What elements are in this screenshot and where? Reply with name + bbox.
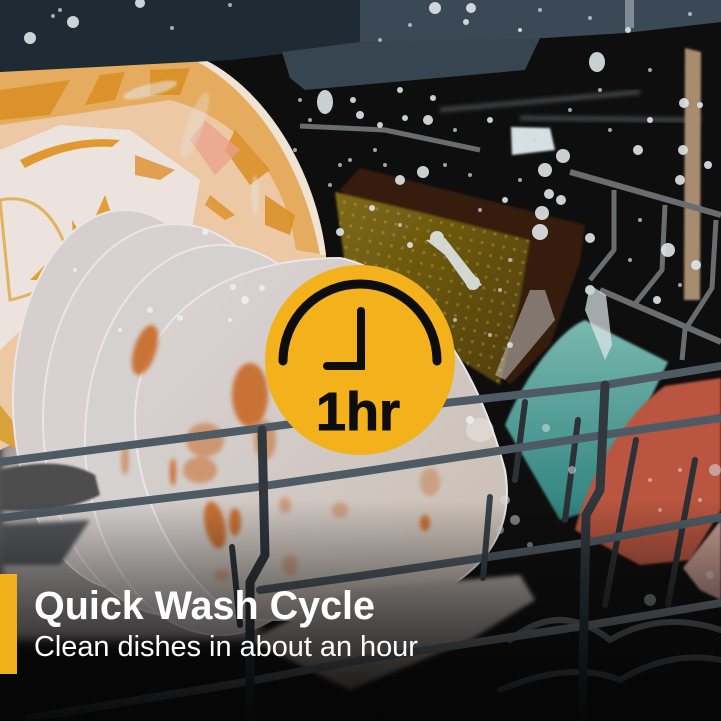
white stacked plates — [13, 210, 507, 635]
badge label: 1hr — [316, 382, 400, 442]
left accent bar — [0, 574, 17, 674]
food stains on plates — [121, 322, 440, 581]
dark lower shade — [0, 500, 721, 721]
brown plate behind olive plate — [340, 168, 585, 385]
teal plate — [505, 320, 668, 520]
large orange patterned plate — [0, 60, 326, 450]
glass jar bottom left — [0, 464, 100, 565]
title: Quick Wash Cycle — [34, 584, 375, 628]
water beads on white plates — [73, 229, 494, 442]
olive-yellow dimpled plate — [335, 192, 530, 385]
water droplets — [24, 0, 712, 380]
dark rack tines behind front rack — [515, 402, 695, 605]
back rack — [300, 126, 721, 360]
splash on orange plate — [121, 77, 259, 215]
front dish rack — [0, 366, 721, 721]
small spray droplets — [51, 3, 692, 337]
wooden post — [684, 48, 701, 300]
lower basket wires — [500, 620, 721, 690]
top rack bar — [0, 0, 721, 90]
spray over teal and coral plates — [496, 424, 721, 606]
subtitle: Clean dishes in about an hour — [34, 631, 418, 663]
lower left plate mass — [0, 440, 260, 640]
back wall reflections — [440, 92, 700, 120]
icon: clock hands — [327, 311, 361, 366]
icon: clock arc — [283, 284, 437, 361]
pink plate — [683, 520, 721, 600]
bowl at bottom centre — [250, 575, 535, 690]
badge: 1 hour clock — [265, 265, 455, 455]
coral plate — [575, 378, 721, 565]
white detergent cap — [511, 127, 555, 155]
